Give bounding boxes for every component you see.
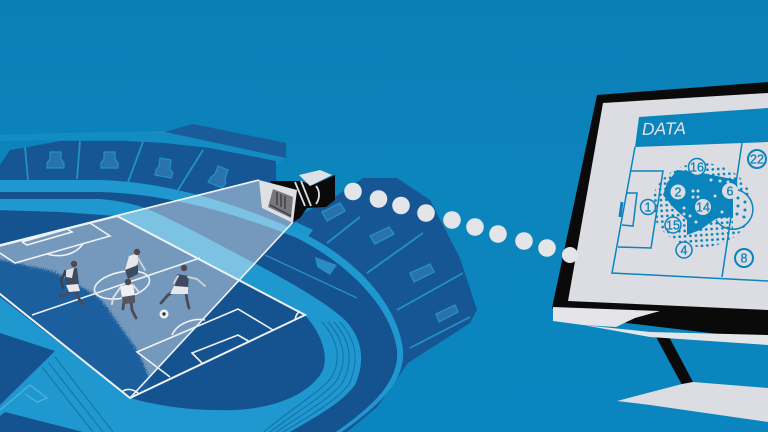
cone edges: [0, 180, 293, 398]
stand separators and seat blocks: [25, 141, 470, 348]
zone dots: [736, 196, 746, 218]
player markers: [640, 150, 766, 267]
lower left stands: [0, 412, 83, 432]
player 2: [125, 249, 145, 279]
monitor screen: [568, 93, 768, 310]
left infield corner: [0, 333, 55, 405]
camera hood: [259, 180, 297, 223]
track lane lines: [42, 322, 355, 432]
stadium: [0, 124, 477, 432]
pitch shadow grain: [0, 256, 152, 402]
stadium roof: [165, 124, 286, 158]
monitor frame: [552, 82, 768, 340]
monitor chin lower edge: [583, 325, 768, 345]
heat map: [652, 163, 752, 247]
dark ring: [0, 192, 397, 432]
infield: [0, 210, 325, 410]
outer light band: [0, 180, 403, 432]
large zone circle: [716, 190, 753, 229]
marker 15: 15: [666, 218, 680, 232]
player 3: [112, 279, 138, 318]
bottom penalty box: [122, 309, 300, 393]
monitor: [552, 82, 768, 345]
pitch base: [0, 216, 305, 398]
DATA header: [635, 108, 768, 147]
light wedge under camera: [280, 222, 313, 238]
player 1: [60, 261, 82, 304]
camera lens shine: [270, 192, 291, 216]
camera lens opening: [268, 189, 293, 218]
marker 1: 1: [645, 200, 652, 214]
marker 4: 4: [681, 244, 688, 258]
data dots: [344, 183, 556, 257]
ring inner line: [265, 255, 357, 298]
football: [160, 310, 168, 318]
camera top box: [299, 170, 332, 186]
marker 22: 22: [750, 152, 764, 166]
stand canopy glow: [0, 131, 286, 165]
players: [60, 249, 205, 318]
camera rings: [295, 181, 319, 206]
heat blob: [663, 170, 739, 235]
player 4: [161, 265, 205, 308]
top penalty box: [0, 223, 110, 263]
large zone right half: [733, 192, 750, 228]
marker 6: 6: [727, 184, 734, 198]
camera: [259, 170, 335, 223]
marker 2: 2: [675, 186, 682, 200]
blob holes: [682, 178, 730, 224]
last data dot: [562, 247, 578, 263]
tactical pitch lines: [612, 143, 768, 281]
marker 8: 8: [741, 252, 748, 266]
running track: [0, 199, 361, 432]
pitch markings: [0, 216, 305, 398]
monitor stand neck: [655, 335, 693, 385]
stands: [0, 141, 477, 432]
halftone dots: [652, 163, 752, 247]
camera body: [270, 175, 335, 222]
monitor base: [617, 382, 768, 422]
halfway line and centre circle: [32, 258, 200, 315]
monitor chin: [553, 307, 660, 327]
ring tab: [315, 257, 337, 275]
marker 16: 16: [690, 160, 704, 174]
camera light cone: [0, 180, 293, 398]
DATA label: DATA: [642, 118, 686, 139]
marker 14: 14: [696, 200, 710, 214]
track marking: [0, 385, 47, 410]
